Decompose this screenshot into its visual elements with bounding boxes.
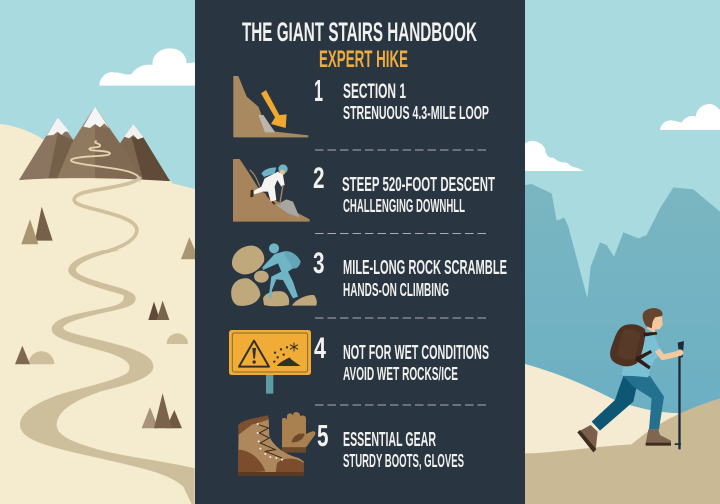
description 1: STRENUOUS 4.3-MILE LOOP — [343, 103, 489, 123]
description 4: AVOID WET ROCKS/ICE — [343, 364, 458, 384]
central dark panel — [195, 0, 525, 504]
icon: slope with arrow — [233, 76, 308, 137]
step 4 — [229, 330, 489, 394]
heading 1: SECTION 1 — [343, 80, 406, 103]
step 1 — [233, 73, 489, 137]
divider 2 — [315, 232, 490, 234]
number 1: 1 — [314, 73, 323, 108]
icon: rock scramble climber — [231, 243, 317, 306]
divider 1 — [315, 149, 490, 151]
number 3: 3 — [313, 247, 324, 280]
sand hill — [0, 124, 195, 504]
winding trail on the mountain — [71, 141, 140, 182]
title: THE GIANT STAIRS HANDBOOK — [242, 17, 477, 47]
step 3 — [231, 243, 507, 306]
boot — [238, 415, 304, 476]
step 2 — [233, 159, 495, 222]
icon: climber descending slope — [233, 159, 310, 222]
glove — [282, 412, 315, 453]
small trees and mounds — [15, 207, 195, 428]
right scene: hiker landscape — [525, 0, 720, 504]
description 2: CHALLENGING DOWNHLL — [343, 196, 465, 216]
step 5 — [238, 412, 464, 476]
hiker with backpack and trekking pole — [577, 308, 684, 452]
heading 4: NOT FOR WET CONDITIONS — [343, 342, 489, 364]
icon: warning sign — [229, 330, 311, 394]
subtitle: EXPERT HIKE — [319, 46, 408, 73]
description 5: STURDY BOOTS, GLOVES — [343, 451, 464, 471]
hiker legs and boots — [577, 355, 681, 452]
icon: boots and gloves — [238, 412, 315, 476]
left cloud — [99, 48, 195, 86]
distant blue mountains — [525, 184, 720, 413]
heading 5: ESSENTIAL GEAR — [343, 429, 436, 451]
right clouds — [525, 104, 720, 171]
foreground hills — [525, 364, 720, 504]
number 4: 4 — [314, 332, 326, 365]
description 3: HANDS-ON CLIMBING — [343, 280, 449, 300]
hiker upper body — [610, 308, 684, 377]
divider 3 — [315, 317, 490, 319]
left scene: mountain landscape — [0, 0, 195, 504]
number 2: 2 — [313, 162, 324, 195]
number 5: 5 — [317, 418, 328, 453]
winding trail on the sand — [20, 177, 195, 504]
heading 3: MILE-LONG ROCK SCRAMBLE — [343, 257, 507, 279]
divider 4 — [315, 404, 490, 406]
mountain range — [18, 107, 172, 192]
snowcaps — [47, 107, 143, 139]
heading 2: STEEP 520-FOOT DESCENT — [342, 174, 495, 196]
